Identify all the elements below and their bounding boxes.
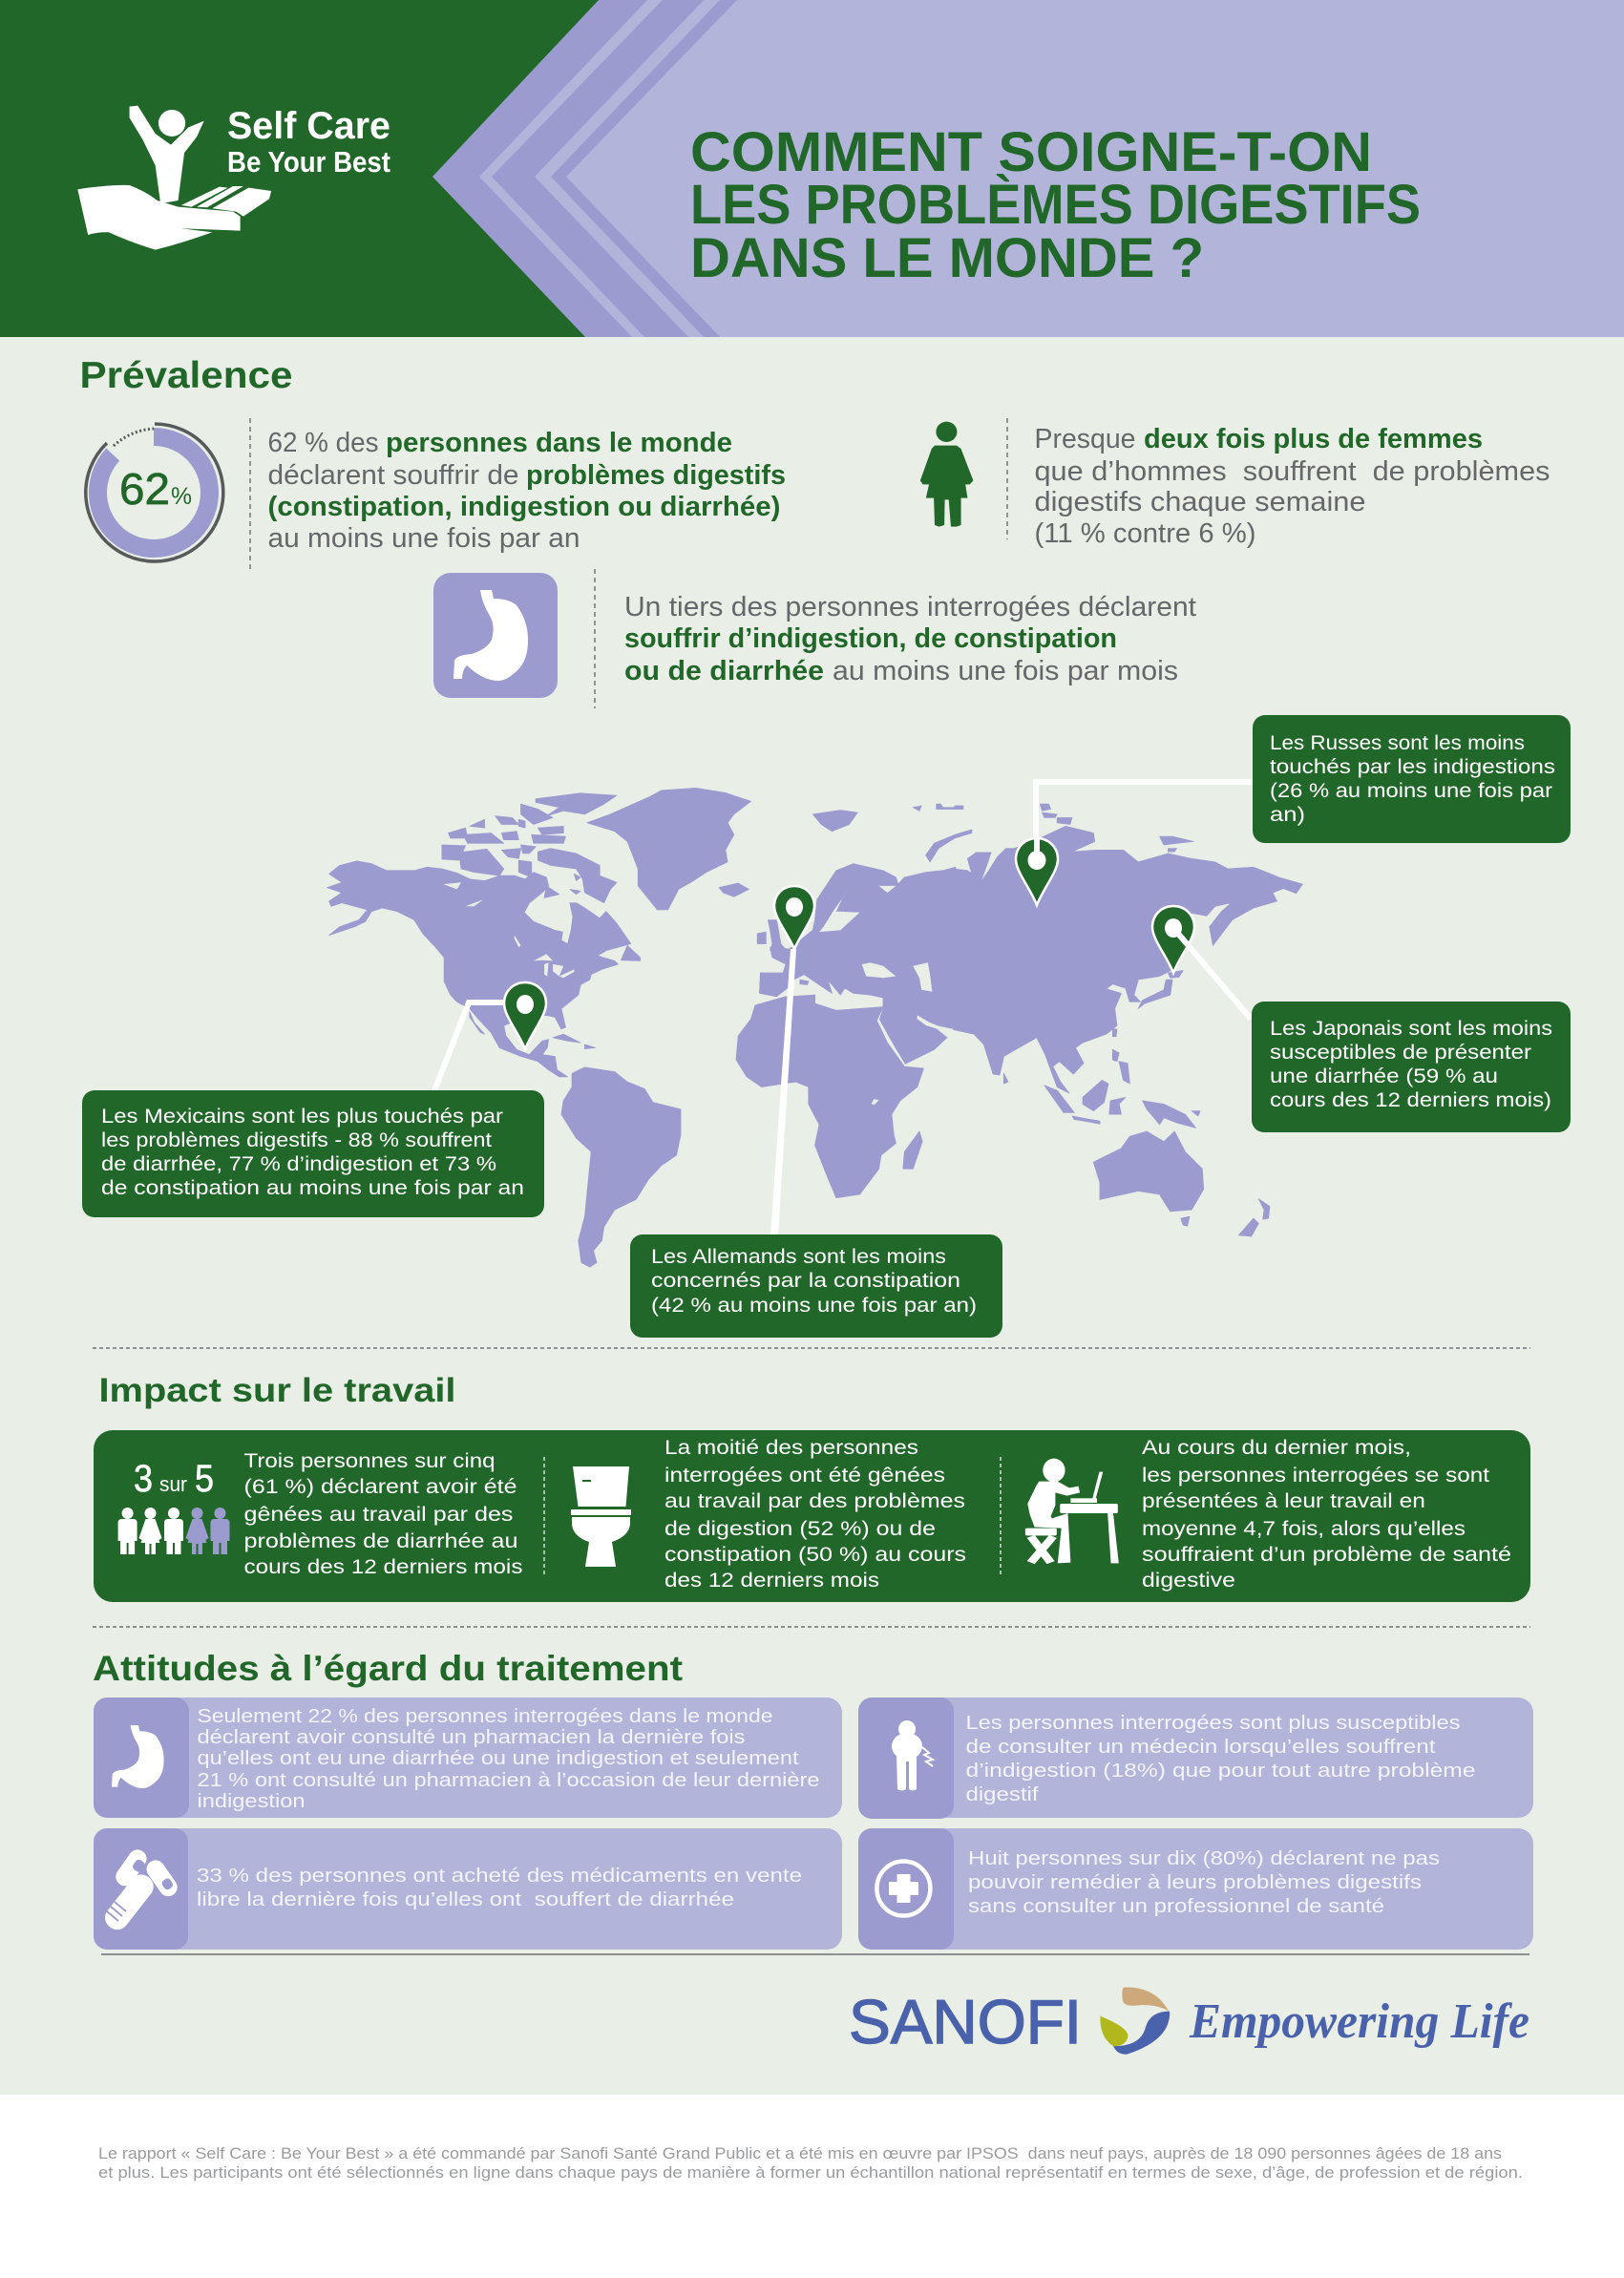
heading: Impact sur le travail: Impact sur le travail — [99, 1372, 456, 1409]
text: half of respondents: au travail par des problèmes — [664, 1490, 965, 1512]
card text: pouvoir remédier à leurs problèmes digestifs — [968, 1872, 1422, 1893]
callout: Japan: une diarrhée (59 % au — [1270, 1065, 1498, 1087]
map pin: Russia — [1016, 838, 1058, 905]
text: three in five: gênées au travail par des — [244, 1504, 514, 1526]
text: three in five: Trois personnes sur cinq — [244, 1450, 495, 1472]
map pin: Germany — [774, 886, 814, 949]
brand tagline: Be Your Best — [227, 145, 390, 179]
footer note: et plus. Les participants ont été sélectionnés en ligne dans chaque pays de manière à former un échantillon national représentatif en termes de sexe, d’âge, de profession et de région. — [98, 2163, 1523, 2182]
stat: 3 sur 5: sur — [159, 1472, 187, 1496]
card text: qu’elles ont eu une diarrhée ou une indigestion et seulement — [197, 1748, 799, 1769]
chart: 62% donut — [86, 424, 223, 561]
callout: Germany — [630, 1234, 1002, 1338]
callout: Russia: (26 % au moins une fois par — [1270, 780, 1552, 802]
stat: 3 sur 5: 5 — [195, 1458, 214, 1500]
text: last month presenteeism — [1142, 1437, 1511, 1592]
header banner — [0, 0, 1624, 337]
icon: woman — [920, 422, 973, 527]
text: three in five: problèmes de diarrhée au — [244, 1530, 517, 1552]
slogan: Empowering Life — [1189, 1994, 1529, 2049]
callout: Russia: an) — [1270, 804, 1305, 826]
leader line: Japan — [1173, 928, 1251, 1019]
title: DANS LE MONDE ? — [690, 227, 1204, 289]
callout: Russia: touchés par les indigestions — [1270, 756, 1555, 778]
text: half of respondents — [664, 1437, 966, 1592]
callout: Germany: concernés par la constipation — [651, 1270, 960, 1292]
card: pharmacist consultation — [94, 1698, 842, 1818]
leader line: Germany — [770, 949, 796, 1235]
title: COMMENT SOIGNE-T-ON — [690, 121, 1372, 183]
leader line: Mexico — [433, 1002, 506, 1093]
card text: d’indigestion (18%) que pour tout autre problème — [966, 1761, 1476, 1782]
icon: stomach tile — [433, 573, 558, 698]
panel: impact on work — [94, 1430, 1530, 1602]
brand name: Self Care — [227, 105, 390, 147]
heading: Attitudes à l'égard du traitement: Attitudes à l’égard du traitement — [93, 1649, 683, 1688]
stat: 3 sur 5: 3 — [134, 1458, 153, 1500]
card text: digestif — [966, 1784, 1039, 1805]
stat: 3 sur 5 — [134, 1458, 214, 1500]
card text: 21 % ont consulté un pharmacien à l’occasion de leur dernière — [197, 1770, 819, 1791]
card text — [968, 1848, 1440, 1917]
text: last month presenteeism: présentées à leur travail en — [1142, 1490, 1425, 1512]
chart: 62% donut: % — [171, 483, 192, 510]
text: last month presenteeism: souffraient d’un problème de santé — [1142, 1544, 1511, 1566]
card text — [197, 1706, 819, 1812]
card text: déclarent avoir consulté un pharmacien la dernière fois — [197, 1727, 745, 1748]
text: half of respondents: de digestion (52 %) ou de — [664, 1518, 936, 1540]
icon: person and hand — [77, 106, 271, 250]
text: 62 % prevalence: (constipation, indigestion ou diarrhée) — [267, 492, 781, 522]
text: 62 % prevalence: au moins une fois par an — [267, 523, 580, 554]
text: women twice as affected: (11 % contre 6 %) — [1035, 518, 1256, 549]
callout: Mexico — [82, 1090, 544, 1217]
text: three in five — [244, 1450, 523, 1578]
icon: Sanofi bird — [1100, 1988, 1170, 2055]
icon: medical cross — [876, 1862, 930, 1915]
callout: Japan: susceptibles de présenter — [1270, 1042, 1531, 1064]
icon: person at laptop — [1025, 1459, 1119, 1563]
text: women twice as affected — [1035, 424, 1550, 549]
card text: de consulter un médecin lorsqu’elles souffrent — [966, 1737, 1436, 1758]
card: professional advice — [858, 1828, 1533, 1950]
text: women twice as affected: que d’hommes souffrent de problèmes — [1035, 456, 1550, 487]
text: last month presenteeism: les personnes interrogées se sont — [1142, 1465, 1489, 1487]
card: over the counter — [94, 1828, 842, 1950]
callout: Mexico: de constipation au moins une fois par an — [101, 1177, 524, 1199]
text: one third monthly: ou de diarrhée — [624, 656, 824, 686]
card text: Les personnes interrogées sont plus susceptibles — [966, 1713, 1461, 1734]
text: three in five: (61 %) déclarent avoir été — [244, 1476, 517, 1498]
icon: five people — [118, 1508, 229, 1554]
text: 62 % prevalence: personnes dans le monde — [386, 428, 732, 458]
callout: Mexico: les problèmes digestifs - 88 % souffrent — [101, 1129, 492, 1151]
text: last month presenteeism: digestive — [1142, 1570, 1235, 1592]
text: women twice as affected: deux fois plus de femmes — [1144, 424, 1483, 454]
world map — [327, 788, 1302, 1267]
card text — [966, 1713, 1476, 1805]
card: doctor consultation — [858, 1698, 1533, 1819]
text: half of respondents: interrogées ont été gênées — [664, 1465, 945, 1487]
text: 62 % prevalence: problèmes digestifs — [526, 460, 786, 491]
text: women twice as affected: Presque — [1035, 424, 1136, 454]
text: 62 % prevalence — [267, 428, 786, 554]
callout: Japan — [1252, 1002, 1571, 1132]
text: half of respondents: des 12 derniers mois — [664, 1570, 879, 1592]
icon: person in pain — [892, 1720, 933, 1791]
callout: Russia — [1253, 715, 1571, 843]
text: women twice as affected: digestifs chaque semaine — [1035, 487, 1365, 517]
text: last month presenteeism: moyenne 4,7 fois, alors qu’elles — [1142, 1518, 1466, 1540]
callout: Mexico: de diarrhée, 77 % d’indigestion et 73 % — [101, 1153, 496, 1175]
heading: Prévalence: Prévalence — [80, 355, 292, 396]
callout: Germany: Les Allemands sont les moins — [651, 1246, 946, 1268]
icon: pills — [100, 1846, 180, 1934]
card text: Huit personnes sur dix (80%) déclarent ne pas — [968, 1848, 1440, 1869]
leader line: Russia — [1036, 782, 1255, 858]
card text: 33 % des personnes ont acheté des médicaments en vente — [197, 1866, 802, 1887]
text: one third monthly: souffrir d’indigestion, de constipation — [624, 623, 1117, 654]
title — [690, 121, 1421, 289]
text: 62 % prevalence: 62 % des — [267, 428, 378, 458]
callout: Germany: (42 % au moins une fois par an) — [651, 1295, 977, 1317]
text: half of respondents: La moitié des personnes — [664, 1437, 918, 1459]
callout: Mexico: Les Mexicains sont les plus touchés par — [101, 1106, 503, 1128]
icon: stomach — [112, 1725, 164, 1788]
text: last month presenteeism: Au cours du dernier mois, — [1142, 1437, 1411, 1459]
card text: sans consulter un professionnel de santé — [968, 1896, 1384, 1917]
logo: Self Care Be Your Best — [77, 105, 390, 250]
map pin: Mexico — [504, 982, 546, 1049]
wordmark: SANOFI — [849, 1987, 1082, 2057]
icon: toilet — [571, 1466, 631, 1567]
card text — [197, 1866, 802, 1910]
card text: indigestion — [197, 1791, 306, 1812]
callout: Japan: Les Japonais sont les moins — [1270, 1018, 1552, 1040]
text: three in five: cours des 12 derniers mois — [244, 1556, 523, 1578]
text: one third monthly: au moins une fois par mois — [833, 656, 1178, 686]
text: 62 % prevalence: déclarent souffrir de — [267, 460, 519, 491]
text: one third monthly: Un tiers des personnes interrogées déclarent — [624, 592, 1196, 622]
text: one third monthly — [624, 592, 1196, 686]
title: LES PROBLÈMES DIGESTIFS — [690, 174, 1421, 236]
text: half of respondents: constipation (50 %) au cours — [664, 1544, 966, 1566]
footer note: Le rapport « Self Care : Be Your Best » a été commandé par Sanofi Santé Grand Public et a été mis en œuvre par IPSOS dans neuf pays, auprès de 18 090 personnes âgées de 18 ans — [98, 2144, 1502, 2162]
footer note — [98, 2144, 1523, 2182]
card text: Seulement 22 % des personnes interrogées dans le monde — [197, 1706, 773, 1727]
map pin: Japan — [1152, 906, 1194, 973]
chart: 62% donut: 62 — [119, 464, 170, 514]
callout: Russia: Les Russes sont les moins — [1270, 732, 1525, 754]
logo: Sanofi Empowering Life — [849, 1987, 1529, 2057]
card text: libre la dernière fois qu’elles ont souffert de diarrhée — [197, 1889, 734, 1910]
callout: Japan: cours des 12 derniers mois) — [1270, 1089, 1551, 1111]
